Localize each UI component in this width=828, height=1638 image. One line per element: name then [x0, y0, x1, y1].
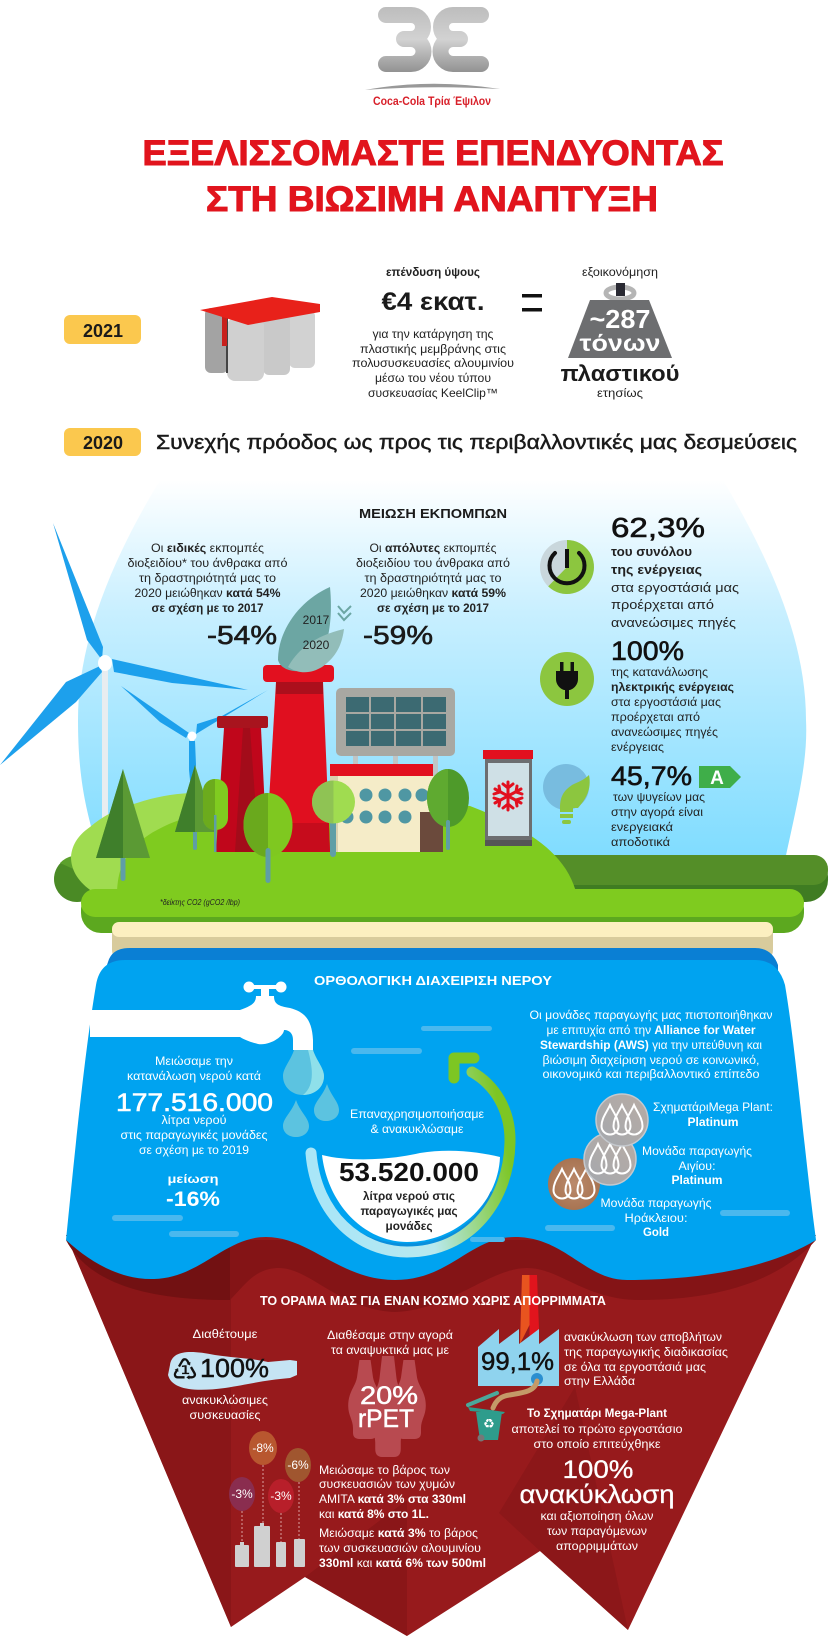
- text block: plant certifications: Platinum: [672, 1173, 722, 1187]
- text block: recycled water caption: Επαναχρησιμοποιήσαμε: [350, 1107, 485, 1121]
- text block: absolute emissions: διοξειδίου του άνθρακα από: [356, 556, 510, 570]
- logo: 3E Coca-Cola Τρία Έψιλον: [365, 15, 500, 108]
- text block: recycled litres: μονάδες: [386, 1219, 432, 1233]
- icon and text: recyclable bottle: 100%: [200, 1353, 269, 1383]
- chart: packaging weight balloons: [229, 1431, 311, 1567]
- text block: plant certifications: Gold: [643, 1225, 669, 1239]
- text block: mega plant: και αξιοποίηση όλων: [540, 1509, 654, 1523]
- text block: investment: €4 εκατ.: [382, 288, 484, 316]
- text block: plant certifications: Ηράκλειου:: [624, 1211, 688, 1225]
- chart: packaging weight balloons: -3%: [231, 1487, 253, 1501]
- text block: lighter packaging: [319, 1463, 486, 1570]
- stat: electricity 100%: προέρχεται από: [611, 710, 700, 724]
- small chimney: [216, 716, 268, 852]
- text block: plant certifications: Μονάδα παραγωγής: [642, 1144, 752, 1158]
- leaf: 2017 to 2020: 2020: [303, 638, 330, 652]
- leaf: 2017 to 2020: 2017: [303, 613, 330, 627]
- text block: mega plant: των παραγόμενων: [547, 1524, 647, 1538]
- stat: fridges 45.7%: [611, 761, 741, 849]
- stat: renewable energy 62.3%: 62,3%: [611, 512, 705, 543]
- text block: investment: μέσω του νέου τύπου: [375, 371, 491, 385]
- heading: water management: ΟΡΘΟΛΟΓΙΚΗ ΔΙΑΧΕΙΡΙΣΗ ΝΕΡΟΥ: [314, 973, 552, 988]
- text block: investment: επένδυση ύψους: [386, 265, 480, 279]
- stat: electricity 100%: της κατανάλωσης: [611, 665, 708, 679]
- medal: gold: [548, 1158, 600, 1210]
- icon: water tap: [90, 982, 313, 1050]
- text block: plant certifications: Αιγίου:: [678, 1159, 716, 1173]
- icon: factory with recycling: ♻: [483, 1416, 495, 1431]
- text block: process waste recycling: ανακύκλωση των αποβλήτων: [564, 1330, 722, 1344]
- text block: mega plant: στο οποίο επιτεύχθηκε: [534, 1437, 661, 1451]
- text block: specific emissions: -54%: [207, 620, 277, 650]
- text block: mega plant: απορριμμάτων: [556, 1539, 638, 1553]
- sand strip: [112, 922, 773, 962]
- stat: fridges 45.7%: ενεργειακά: [611, 820, 673, 834]
- text block: plant certifications: [600, 1100, 773, 1239]
- heading: emissions reduction: ΜΕΙΩΣΗ ΕΚΠΟΜΠΩΝ: [359, 506, 507, 521]
- text block: AWS certification: βιώσιμη διαχείριση νερού σε κοινωνικό,: [542, 1053, 760, 1067]
- text block: mega plant: Το Σχηματάρι Mega-Plant: [527, 1406, 667, 1420]
- hill: [71, 790, 576, 892]
- text block: mega plant: 100%: [562, 1456, 634, 1484]
- text block: absolute emissions: τη δραστηριότητά μας το: [364, 571, 502, 585]
- leaf: 2017 to 2020: [278, 587, 351, 672]
- trees: [96, 765, 469, 883]
- logo: 3E Coca-Cola Τρία Έψιλον: Coca-Cola Τρία Έψιλον: [373, 94, 491, 108]
- stat: electricity 100%: ηλεκτρικής ενέργειας: [611, 680, 734, 694]
- text block: water reduction: 177.516.000: [116, 1089, 273, 1117]
- text block: water reduction: λίτρα νερού: [162, 1113, 226, 1127]
- stat: fridges 45.7%: στην αγορά είναι: [611, 805, 703, 819]
- icon: weight with plastic savings: ετησίως: [597, 386, 643, 400]
- text block: recycled litres: λίτρα νερού στις: [363, 1189, 455, 1203]
- badge: 2020: [64, 428, 141, 456]
- large chimney: [263, 665, 334, 852]
- icon: weight with plastic savings: εξοικονόμηση: [582, 265, 658, 279]
- icon: plug: [540, 652, 594, 706]
- stat: 99.1% value: 99,1%: [481, 1348, 554, 1376]
- title: ΣΤΗ ΒΙΩΣΙΜΗ ΑΝΑΠΤΥΞΗ: [206, 180, 658, 219]
- text block: water reduction: στις παραγωγικές μονάδες: [120, 1128, 268, 1142]
- badge: 2020: 2020: [83, 433, 123, 453]
- chart: packaging weight balloons: -8%: [252, 1441, 274, 1455]
- stat: renewable energy 62.3%: στα εργοστάσιά μας: [611, 580, 739, 595]
- front grass strip: [81, 889, 804, 933]
- text block: plant certifications: Platinum: [688, 1115, 738, 1129]
- text block: water reduction: μείωση: [168, 1172, 218, 1186]
- icon and text: rPET bottles: rPET: [358, 1405, 414, 1433]
- icon: power donut: [540, 540, 594, 594]
- stat: renewable energy 62.3%: της ενέργειας: [611, 562, 702, 577]
- heading: zero waste vision: ΤΟ ΟΡΑΜΑ ΜΑΣ ΓΙΑ ΕΝΑΝ ΚΟΣΜΟ ΧΩΡΙΣ ΑΠΟΡΡΙΜΜΑΤΑ: [260, 1293, 607, 1308]
- panel: water section background: [66, 948, 816, 1280]
- text block: specific emissions: Οι ειδικές εκπομπές: [151, 541, 264, 555]
- text block: water reduction: [116, 1054, 273, 1211]
- icon: weight with plastic savings: πλαστικού: [560, 361, 680, 386]
- icon: weight with plastic savings: [560, 265, 680, 400]
- text block: investment: για την κατάργηση της: [372, 327, 494, 341]
- icon: recycling arrow with water: [311, 1058, 510, 1252]
- text block: process waste recycling: της παραγωγικής διαδικασίας: [564, 1345, 728, 1359]
- icon: factory with recycling: [468, 1275, 559, 1442]
- text block: absolute emissions: Οι απόλυτες εκπομπές: [370, 541, 497, 555]
- icon: KeelClip can pack: [200, 297, 320, 381]
- wind turbine: large: [0, 523, 248, 863]
- text block: water reduction: σε σχέση με το 2019: [139, 1143, 249, 1157]
- panel: red waste section background: [66, 1235, 816, 1636]
- text block: recycled water caption: & ανακυκλώσαμε: [370, 1122, 464, 1136]
- text block: investment: [352, 265, 514, 400]
- chart: packaging weight balloons: -6%: [287, 1458, 309, 1472]
- icon: weight with plastic savings: τόνων: [580, 330, 660, 356]
- back hills strip: [54, 855, 828, 902]
- stat: electricity 100%: 100%: [611, 636, 684, 666]
- stat: fridges 45.7%: αποδοτικά: [611, 835, 670, 849]
- text block: water reduction: Μειώσαμε την: [155, 1054, 233, 1068]
- icon and text: recyclable bottle: Διαθέτουμε: [192, 1327, 258, 1341]
- factory building: [330, 764, 443, 852]
- stat: fridges 45.7%: των ψυγείων μας: [613, 790, 705, 804]
- stat: renewable energy 62.3%: ανανεώσιμες πηγές: [611, 615, 736, 630]
- text block: specific emissions: σε σχέση με το 2017: [152, 601, 264, 615]
- stat: electricity 100%: ενέργειας: [611, 740, 664, 754]
- icon and text: recyclable bottle: συσκευασίες: [190, 1408, 261, 1422]
- text block: absolute emissions: -59%: [363, 620, 433, 650]
- text block: plant certifications: Μονάδα παραγωγής: [600, 1196, 712, 1210]
- text block: process waste recycling: σε όλα τα εργοστάσιά μας: [564, 1360, 706, 1374]
- icon and text: recyclable bottle: ♳: [172, 1354, 198, 1387]
- panel: emissions landscape: [0, 480, 828, 962]
- text block: absolute emissions: 2020 μειώθηκαν κατά 59%: [360, 586, 506, 600]
- stat: renewable energy 62.3%: [611, 512, 739, 630]
- text block: AWS certification: με επιτυχία από την Alliance for Water: [546, 1023, 756, 1037]
- stat: electricity 100%: [611, 636, 734, 754]
- text block: water reduction: -16%: [166, 1188, 220, 1211]
- icon: eco light bulb: [543, 764, 590, 824]
- text block: lighter packaging: συσκευασιών των χυμών: [319, 1477, 455, 1491]
- stat: fridges 45.7%: A: [710, 768, 724, 789]
- badge: 2021: 2021: [83, 321, 123, 341]
- icon: equals sign: [522, 294, 542, 312]
- text block: lighter packaging: 330ml και κατά 6% των 500ml: [319, 1556, 486, 1570]
- text block: plant certifications: ΣχηματάριMega Plant:: [653, 1100, 773, 1114]
- fridge: [483, 750, 533, 846]
- medal: platinum Schimatari: [596, 1094, 648, 1146]
- text block: specific emissions: [128, 541, 288, 650]
- text block: lighter packaging: και κατά 8% στο 1L.: [319, 1507, 429, 1521]
- text block: mega plant: [512, 1406, 683, 1553]
- text block: specific emissions: διοξειδίου* του άνθρακα από: [128, 556, 288, 570]
- icon and text: rPET bottles: τα αναψυκτικά μας με: [331, 1343, 450, 1357]
- text block: recycled litres: παραγωγικές μας: [360, 1204, 458, 1218]
- stat: fridges 45.7%: 45,7%: [611, 761, 692, 791]
- icon and text: recyclable bottle: ανακυκλώσιμες: [182, 1393, 268, 1407]
- text block: recycled water caption: [350, 1107, 485, 1136]
- text block: mega plant: αποτελεί το πρώτο εργοστάσιο: [512, 1422, 683, 1436]
- text block: AWS certification: [530, 1008, 772, 1081]
- stat: renewable energy 62.3%: του συνόλου: [611, 544, 692, 559]
- text block: absolute emissions: σε σχέση με το 2017: [377, 601, 489, 615]
- text block: recycled litres: [339, 1157, 479, 1233]
- text block: investment: πολυσυσκευασίες αλουμινίου: [352, 356, 514, 370]
- text block: lighter packaging: Μειώσαμε το βάρος των: [319, 1463, 450, 1477]
- icon and text: recyclable bottle: [168, 1327, 297, 1422]
- icon and text: rPET bottles: Διαθέσαμε στην αγορά: [327, 1328, 453, 1342]
- icon: AWS medals: [548, 1094, 648, 1210]
- text block: process waste recycling: στην Ελλάδα: [564, 1374, 635, 1388]
- text block: AWS certification: Οι μονάδες παραγωγής μας πιστοποιήθηκαν: [530, 1008, 772, 1022]
- stat: renewable energy 62.3%: προέρχεται από: [611, 597, 714, 612]
- text block: AWS certification: οικονομικό και περιβαλλοντικό επίπεδο: [542, 1067, 760, 1081]
- stat: electricity 100%: ανανεώσιμες πηγές: [611, 725, 718, 739]
- text block: absolute emissions: [356, 541, 510, 650]
- icon: weight with plastic savings: ~287: [590, 304, 650, 334]
- text block: specific emissions: 2020 μειώθηκαν κατά 54%: [134, 586, 281, 600]
- text block: investment: συσκευασίας KeelClip™: [368, 386, 498, 400]
- heading: continuous progress: Συνεχής πρόοδος ως προς τις περιβαλλοντικές μας δεσμεύσεις: [156, 432, 797, 454]
- footnote: *δείκτης CO2 (gCO2 /lbp): [160, 898, 240, 907]
- title: [142, 134, 724, 219]
- text block: investment: πλαστικής μεμβράνης στις: [360, 342, 506, 356]
- title: ΕΞΕΛΙΣΣΟΜΑΣΤΕ ΕΠΕΝΔΥΟΝΤΑΣ: [142, 134, 724, 173]
- icon: water drops: [283, 1050, 339, 1137]
- text block: mega plant: ανακύκλωση: [520, 1479, 674, 1509]
- text block: water reduction: κατανάλωση νερού κατά: [127, 1069, 261, 1083]
- text block: lighter packaging: ΑΜΙΤΑ κατά 3% στα 330ml: [319, 1492, 466, 1506]
- text block: process waste recycling: [564, 1330, 728, 1388]
- text block: specific emissions: τη δραστηριότητά μας το: [139, 571, 276, 585]
- medal: platinum Aigio: [584, 1133, 636, 1185]
- icon and text: rPET bottles: 20%: [360, 1382, 418, 1410]
- icon and text: rPET bottles: [327, 1328, 453, 1457]
- text block: AWS certification: Stewardship (AWS) για την υπεύθυνη και: [540, 1038, 762, 1052]
- chart: packaging weight balloons: -3%: [270, 1489, 292, 1503]
- text block: lighter packaging: Μειώσαμε κατά 3% το βάρος: [319, 1526, 478, 1540]
- text block: recycled litres: 53.520.000: [339, 1157, 479, 1187]
- wind turbine: small: [121, 686, 268, 838]
- badge: 2021: [64, 315, 141, 344]
- solar panel: [336, 688, 455, 776]
- text block: lighter packaging: των συσκευασιών αλουμινίου: [319, 1541, 481, 1555]
- stat: electricity 100%: στα εργοστάσιά μας: [611, 695, 721, 709]
